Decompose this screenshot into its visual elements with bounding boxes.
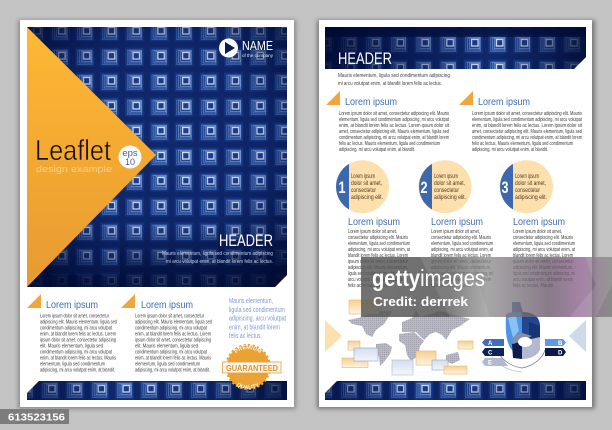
body text (513, 229, 575, 289)
numbered circle 3: adipiscing elit. (515, 194, 547, 201)
body text: condimentum adipiscing, mi arcu volutpat (135, 326, 207, 332)
heading: Lorem ipsum (348, 217, 400, 228)
body text: felis ac lectus. Mauris elementum, ligula sed condimentum (472, 141, 573, 147)
numbered circle 3: dolor sit amet, (515, 180, 546, 187)
body text (348, 229, 410, 289)
body text: elementum, ligula sed condimentum (40, 362, 105, 368)
header band (325, 27, 586, 69)
top column 2 (459, 91, 583, 153)
seal: premium quality guaranteed: GUARANTEED (226, 363, 278, 373)
cover panel with blue square pattern (27, 27, 287, 287)
badge: eps 10 (118, 146, 142, 168)
heading: Lorem ipsum (478, 97, 530, 108)
numbered circle 1: 1 (338, 178, 346, 197)
body text: arcu volutpat enim, at blandit lorem (431, 277, 491, 283)
body text: consectetur adipiscing elit. Mauris (513, 235, 573, 241)
icon: orange corner triangle (121, 294, 135, 308)
body text: Lorem ipsum dolor sit amet, consectetur (40, 314, 109, 320)
body text: enim, at blandit lorem felis ac lectus. Lorem (135, 332, 211, 338)
label pill E: E (488, 360, 492, 366)
body text: felis ac lectus. Mauris (431, 283, 471, 289)
body text: adipiscing elit. Mauris elementum, (513, 265, 573, 271)
body text: adipiscing, mi arcu volutpat enim, at (513, 247, 575, 253)
body text: consectetur adipiscing elit. Mauris (431, 235, 491, 241)
numbered circle 2: Lorem ipsum (434, 173, 458, 180)
body text: adipiscing, mi arcu volutpat enim, at blandit. (339, 147, 415, 153)
numbered circle 3 (500, 160, 553, 213)
body text: ipsum dolor sit amet, consectetur (513, 259, 573, 265)
watermark band (361, 257, 612, 317)
numbered circle 1: consectetur (351, 187, 376, 194)
image id tag: 613523156 (8, 412, 65, 424)
lower column 3 (513, 217, 575, 289)
icon: orange corner triangle (326, 91, 340, 105)
body text: elementum, ligula sed condimentum (135, 362, 200, 368)
title: Leaflet: Leaflet (35, 135, 111, 167)
blue side text: Mauris elementum, (229, 296, 273, 305)
numbered circle 2 (418, 160, 472, 213)
logo: play icon (219, 38, 238, 58)
left page (16, 18, 298, 411)
cover text (162, 251, 273, 265)
bottom strip (325, 381, 586, 400)
watermark logo text: gettyimages (372, 265, 485, 291)
body text: adipiscing elit. Mauris elementum, (431, 265, 491, 271)
body text: Lorem ipsum dolor sit amet, consectetur adipiscing elit. Mauris (472, 111, 582, 117)
body text: felis ac lectus. Mauris elementum, ligula sed condimentum (339, 141, 440, 147)
body text: condimentum adipiscing, mi arcu volutpat enim, at blandit lorem (339, 135, 449, 141)
left arrow triangle (325, 320, 342, 352)
numbered circle 1: dolor sit amet, (351, 180, 382, 187)
body text: adipiscing elit. Mauris elementum, ligula sed (40, 320, 117, 326)
column 2 (121, 294, 212, 374)
body text: ipsum dolor sit amet, consectetur (431, 259, 491, 265)
cover text: Mauris elementum, ligula sed condimentum adipiscing (162, 251, 273, 257)
orange triangle (27, 27, 156, 287)
body text: ipsum dolor sit amet, consectetur adipiscing (40, 338, 116, 344)
body text: elementum, ligula sed condimentum (348, 241, 410, 247)
chart arcs (497, 348, 545, 368)
blue side text: adipiscing, arcu volutpat (229, 314, 287, 322)
top column 1 (326, 91, 450, 153)
body text: adipiscing, mi arcu volutpat enim, at (348, 247, 410, 253)
company name: NAME (242, 38, 273, 53)
body text: amet, consectetur adipiscing elit. Mauris elementum, ligula sed (472, 129, 582, 135)
bottom strip (27, 381, 287, 400)
body text: enim, at blandit lorem felis ac lectus. Lorem (40, 332, 116, 338)
body text: enim, at blandit lorem felis ac lectus. Mauris (40, 356, 116, 362)
cover text: mi arcu volutpat enim, at blandit lorem felis ac lectus. (166, 259, 273, 265)
blue side text: enim, at blandit lorem (229, 322, 280, 332)
body text: arcu volutpat enim, at blandit lorem (348, 277, 408, 283)
body text: ligula sed condimentum adipiscing, mi (348, 271, 410, 277)
right arrow triangle (569, 320, 586, 352)
label pill D: D (558, 350, 563, 356)
right page (317, 20, 595, 409)
heading: Lorem ipsum (513, 217, 565, 228)
subtitle: design example: design example (36, 164, 112, 175)
body text: condimentum adipiscing, mi arcu volutpat (135, 350, 207, 356)
body text: elit. Mauris elementum, ligula sed (40, 344, 103, 350)
seal: premium quality guaranteed (222, 344, 282, 390)
chart slices (512, 302, 523, 322)
body text: condimentum adipiscing, mi arcu volutpat (40, 326, 112, 332)
body text: elit. Mauris elementum, ligula sed (135, 344, 198, 350)
watermark credit: Credit: derrrek (373, 294, 469, 309)
body text: blandit lorem felis ac lectus. Lorem (513, 253, 573, 259)
map callout boxes (342, 300, 473, 375)
heading: Lorem ipsum (141, 300, 193, 311)
label pill C: C (488, 350, 493, 356)
body text: elementum, ligula sed condimentum adipiscing, mi arcu volutpat (472, 117, 582, 123)
numbered circle 1: adipiscing elit. (351, 194, 383, 201)
body text: elementum, ligula sed condimentum (513, 241, 575, 247)
body text: enim, at blandit lorem felis ac lectus. Lorem ipsum dolor sit (339, 123, 450, 129)
column 1 (27, 294, 117, 374)
body text: ipsum dolor sit amet, consectetur adipiscing (135, 338, 211, 344)
lower column 1 (348, 217, 410, 289)
body text: felis ac lectus. Mauris (348, 283, 388, 289)
body text: blandit lorem felis ac lectus. Lorem (431, 253, 491, 259)
cover header: HEADER (219, 231, 273, 250)
numbered circle 1 (336, 160, 389, 213)
badge: eps 10: 10 (125, 157, 135, 167)
body text: arcu volutpat enim, at blandit lorem (513, 277, 573, 283)
image id tag (0, 409, 69, 424)
numbered circle 3: Lorem ipsum (515, 173, 539, 180)
intro text: mi arcu volutpat enim, at blandit lorem felis ac lectus. (338, 81, 442, 87)
body text: Lorem ipsum dolor sit amet, (431, 229, 480, 235)
body text (431, 229, 493, 289)
icon: orange corner triangle (459, 91, 473, 105)
body text (339, 111, 450, 153)
blue side text: felis ac lectus. (229, 331, 262, 340)
world map (348, 310, 470, 366)
blue side text: ligula sed condimentum (229, 305, 285, 314)
body text (40, 314, 117, 374)
numbered circle 3: consectetur (515, 187, 540, 194)
numbered circle 1: Lorem ipsum (351, 173, 375, 180)
numbered circle 2: 2 (420, 178, 428, 197)
body text: adipiscing elit. Mauris elementum, (348, 265, 408, 271)
numbered circle 2: adipiscing elit. (434, 194, 466, 201)
body text: condimentum adipiscing, mi arcu volutpat enim, at blandit lorem (472, 135, 582, 141)
company name: of the company (242, 53, 274, 58)
body text: blandit lorem felis ac lectus. Lorem (348, 253, 408, 259)
icon: orange corner triangle (27, 294, 41, 308)
body text: adipiscing, mi arcu volutpat enim, at blandit. (472, 147, 548, 153)
intro text: Mauris elementum, ligula sed condimentum adipiscing (338, 73, 450, 79)
body text: elementum, ligula sed condimentum (431, 241, 493, 247)
body text: elementum, ligula sed condimentum adipiscing, mi arcu volutpat (339, 117, 449, 123)
body text: adipiscing, mi arcu volutpat enim, at blandit. (135, 368, 210, 374)
body text: enim, at blandit lorem felis ac lectus. Mauris (135, 356, 211, 362)
seal: premium quality guaranteed: PREMIUM (234, 345, 262, 354)
body text: adipiscing, mi arcu volutpat enim, at blandit. (40, 368, 115, 374)
intro text (338, 73, 450, 87)
heading: Lorem ipsum (431, 217, 483, 228)
body text: enim, at blandit lorem felis ac lectus. Lorem ipsum dolor sit (472, 123, 583, 129)
numbered circle 2: dolor sit amet, (434, 180, 465, 187)
blue side text (229, 296, 287, 340)
body text (135, 314, 212, 374)
body text: Lorem ipsum dolor sit amet, consectetur (135, 314, 204, 320)
body text: felis ac lectus. Mauris (513, 283, 553, 289)
3D pie chart (482, 302, 566, 372)
lower column 2 (431, 217, 493, 289)
label pill A: A (488, 341, 493, 347)
body text: ligula sed condimentum adipiscing, mi (431, 271, 493, 277)
body text: consectetur adipiscing elit. Mauris (348, 235, 408, 241)
body text: ligula sed condimentum adipiscing, mi (513, 271, 575, 277)
body text: Lorem ipsum dolor sit amet, (348, 229, 397, 235)
body text: adipiscing, mi arcu volutpat enim, at (431, 247, 493, 253)
label pill B: B (558, 341, 563, 347)
body text: condimentum adipiscing, mi arcu volutpat (40, 350, 112, 356)
company name (242, 38, 274, 58)
heading: Lorem ipsum (46, 300, 98, 311)
header title: HEADER (338, 49, 392, 68)
numbered circle 2: consectetur (434, 187, 459, 194)
body text: Lorem ipsum dolor sit amet, consectetur adipiscing elit. Mauris (339, 111, 449, 117)
numbered circle 3: 3 (502, 178, 508, 197)
seal: premium quality guaranteed: QUALITY (237, 382, 258, 389)
body text: Lorem ipsum dolor sit amet, (513, 229, 562, 235)
body text (472, 111, 583, 153)
body text: adipiscing elit. Mauris elementum, ligula sed (135, 320, 212, 326)
heading: Lorem ipsum (345, 97, 397, 108)
body text: ipsum dolor sit amet, consectetur (348, 259, 408, 265)
body text: amet, consectetur adipiscing elit. Mauris elementum, ligula sed (339, 129, 449, 135)
badge: eps 10: eps (122, 148, 138, 159)
